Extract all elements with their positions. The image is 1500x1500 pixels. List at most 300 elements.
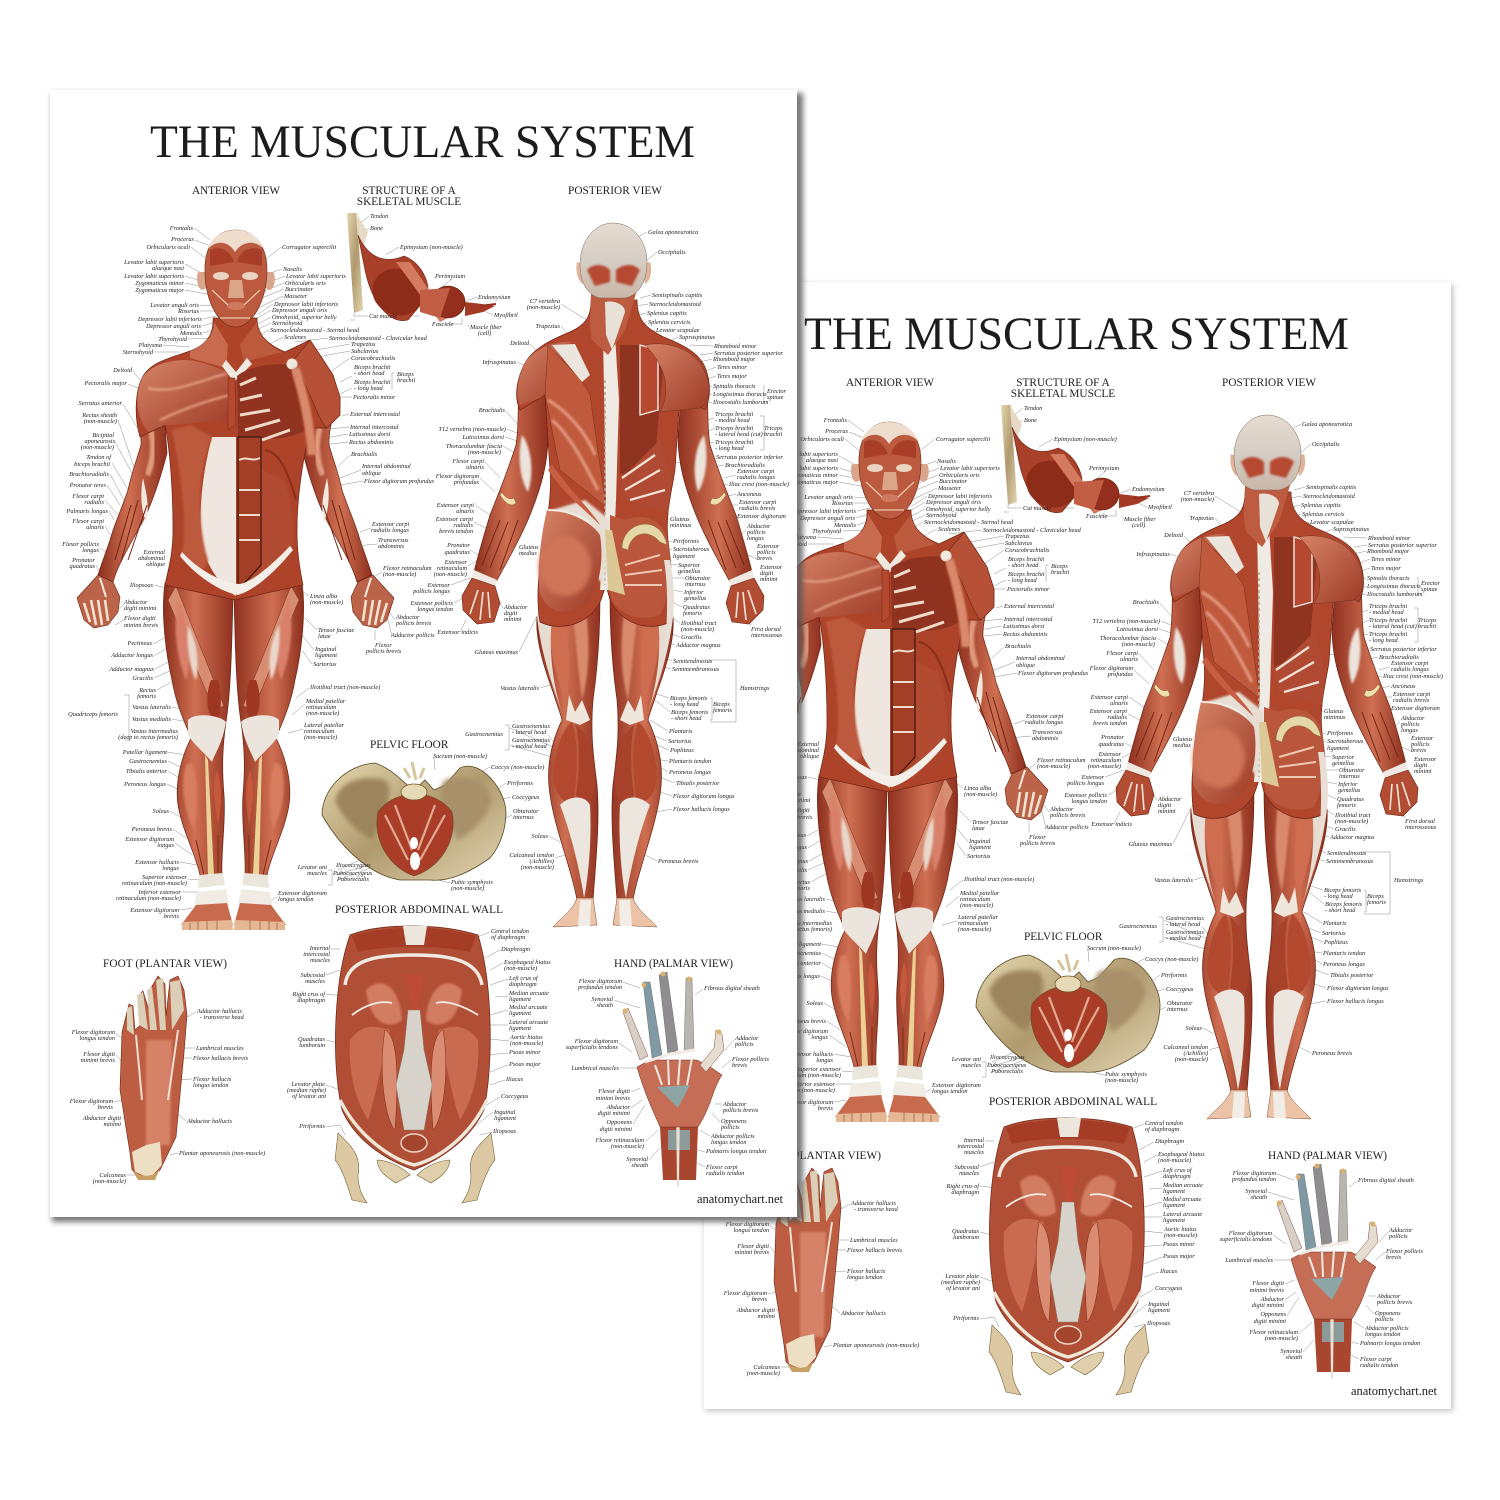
poster 1 labels: Flexor digitorum longus xyxy=(672,793,735,800)
poster 1 labels: Vastus medialis xyxy=(132,716,172,723)
poster 1 labels: Lumbrical muscles xyxy=(195,1045,244,1052)
poster 1 labels: Zygomaticus minor xyxy=(135,280,185,287)
poster 2 labels: Quadriceps femoris xyxy=(722,903,773,910)
poster 2 labels: Flexor carpi xyxy=(1105,650,1138,657)
poster 2 labels: Extensor xyxy=(1098,751,1122,758)
poster 1 labels: Biceps xyxy=(713,701,730,708)
poster 1 website: anatomychart.net xyxy=(697,1192,784,1206)
poster 1 labels: Buccinator xyxy=(285,286,314,293)
poster 2 labels: Peroneus longus xyxy=(1322,961,1365,968)
poster 1 labels: oblique xyxy=(146,561,165,568)
poster 1 labels: longus xyxy=(162,865,180,872)
poster 1 labels: (non-muscle) xyxy=(93,1178,126,1185)
poster 2 heading: structure of a skeletal muscle xyxy=(1011,377,1115,400)
poster 2 labels: Zygomaticus major xyxy=(789,479,839,486)
poster 1 labels: Adductor longus xyxy=(110,652,154,659)
poster 2 labels: minimi brevis xyxy=(1250,1287,1285,1294)
poster 2 labels: minimi xyxy=(1414,768,1432,775)
poster 1 labels: oblique xyxy=(362,470,381,477)
poster 2 labels: Rectus abdominis xyxy=(1002,631,1048,638)
poster 1 labels: Erector xyxy=(766,388,787,395)
poster 1 labels: Rectus abdominis xyxy=(348,439,394,446)
poster 2 labels: External xyxy=(796,741,819,748)
poster 1 labels: Linea alba xyxy=(309,593,337,600)
poster 1 labels: digiti minimi xyxy=(600,1126,632,1133)
poster 2 labels: - lateral head xyxy=(1166,921,1201,928)
poster 1 labels: Gracilis xyxy=(132,675,154,682)
poster 2 labels: Calcaneal tendon xyxy=(1163,1044,1208,1051)
poster 1 labels: radialis longus xyxy=(737,474,776,481)
poster 1 labels: Fibrous digital sheath xyxy=(703,985,760,992)
poster 2 labels: Serratus posterior superior xyxy=(1368,542,1437,549)
poster 1 labels: Right crus of xyxy=(291,991,326,998)
poster 1 labels: Omohyoid, superior belly xyxy=(272,314,337,321)
poster 1 labels: Aortic hiatus xyxy=(509,1034,543,1041)
poster 1 labels: spinae xyxy=(767,394,784,401)
poster 1 labels: Levator plate xyxy=(290,1081,325,1088)
poster 1 labels: Plantar aponeurosis (non-muscle) xyxy=(178,1150,265,1157)
poster 1 labels: Coccyx (non-muscle) xyxy=(491,764,544,771)
poster 2 labels: radialis tendon xyxy=(1360,1362,1398,1369)
poster 1 labels: Obturator xyxy=(685,575,711,582)
poster 1 labels: Puborectalis xyxy=(336,876,369,883)
poster 1 labels: Brachialis xyxy=(351,451,378,458)
poster 2 labels: radialis brevis xyxy=(1393,697,1430,704)
poster 1 labels: ligament xyxy=(315,652,337,659)
poster 2 labels: Bicipital xyxy=(746,624,768,631)
poster 2 labels: Peroneus longus xyxy=(777,973,821,980)
poster 2 labels: muscles xyxy=(959,1170,980,1177)
poster 1 labels: Extensor xyxy=(444,559,468,566)
poster 1 labels: Pronator xyxy=(446,542,471,549)
poster 1 labels: Superior extensor xyxy=(142,874,188,881)
poster 2 labels: - long head xyxy=(1369,637,1399,644)
poster 2 labels: Gracilis xyxy=(1335,826,1356,833)
poster 2 labels: Buccinator xyxy=(939,478,968,485)
poster 2 labels: pollicis xyxy=(1374,1316,1394,1323)
poster 1 labels: Subclavius xyxy=(351,348,379,355)
poster 1 labels: Extensor xyxy=(759,564,783,571)
poster 2 labels: Flexor carpi xyxy=(725,710,758,717)
poster 1 labels: Tensor fasciae xyxy=(318,627,355,634)
poster 2 labels: Infraspinatus xyxy=(1135,551,1171,558)
poster 2 labels: Adductor pollicis xyxy=(1044,824,1089,831)
poster 1 labels: Pronator teres xyxy=(69,482,107,489)
poster 1 labels: Plantaris tendon xyxy=(668,758,711,765)
poster 1 labels: pollicis brevis xyxy=(365,648,402,655)
poster 2 labels: Transversus xyxy=(1032,729,1063,736)
poster 2 labels: Subcostal xyxy=(954,1164,979,1171)
poster 2 labels: - medial head xyxy=(1166,935,1201,942)
poster 1 labels: longus tendon xyxy=(79,1035,115,1042)
poster 1 labels: Vastus lateralis xyxy=(132,704,172,711)
poster 2 labels: Gastrocnemius xyxy=(1166,915,1204,922)
poster 1 labels: Extensor pollicis xyxy=(410,600,454,607)
poster 2 labels: profundus tendon xyxy=(1231,1176,1276,1183)
poster 1 labels: Anconeus xyxy=(736,491,762,498)
poster 1 labels: Pubococcygeus xyxy=(332,870,373,877)
poster 2 labels: biceps brachii xyxy=(728,653,764,660)
poster 2 labels: Brachioradialis xyxy=(1379,654,1419,661)
poster 1 labels: Flexor digitorum xyxy=(69,1098,113,1105)
poster 1 labels: Bicipital xyxy=(92,432,114,439)
poster 1 labels: Psoas major xyxy=(508,1061,541,1068)
poster 2 labels: abdominal xyxy=(792,747,819,754)
poster 1 labels: Gastrocnemius xyxy=(129,758,168,765)
poster 2 labels: Iliopsoas xyxy=(1146,1320,1171,1327)
poster 1 labels: Sternocleidomastoid - Sternal head xyxy=(270,327,360,334)
poster 2 labels: Triceps brachii xyxy=(1369,617,1408,624)
poster 2 labels: Abductor xyxy=(1157,796,1182,803)
poster 2 labels: Gastrocnemius xyxy=(1119,923,1158,930)
poster 2 labels: pollicis brevis xyxy=(1376,1299,1413,1306)
poster 2 labels: Sternocleidomastoid xyxy=(1303,493,1356,500)
poster 1 labels: Corrugator supercilii xyxy=(282,244,336,251)
poster 2 labels: Extensor indicis xyxy=(1090,821,1133,828)
poster 1 labels: muscles xyxy=(310,957,331,964)
poster 1 labels: Serratus posterior inferior xyxy=(716,454,783,461)
poster 2 labels: (deep to rectus femoris) xyxy=(772,926,832,933)
poster 1 labels: Abductor xyxy=(123,599,148,606)
poster 2 labels: Omohyoid, superior belly xyxy=(926,506,991,513)
poster 1 labels: quadratus xyxy=(444,549,471,556)
poster 2 labels: Pectineus xyxy=(781,832,807,839)
poster 2 labels: Flexor digitorum xyxy=(725,1221,769,1228)
poster 1 labels: Mentalis xyxy=(179,330,203,337)
poster 1 labels: retinaculum (non-muscle) xyxy=(122,880,187,887)
poster 1 labels: Internal intercostal xyxy=(349,424,399,431)
poster 1 labels: Flexor digitorum xyxy=(574,1038,618,1045)
poster 1 labels: (non-muscle) xyxy=(521,864,554,871)
poster 2 labels: Pronator teres xyxy=(723,674,761,681)
poster 2 labels: Left crus of xyxy=(1162,1167,1193,1174)
poster 2 labels: Thyrohyoid xyxy=(812,528,842,535)
poster 1 diagram: foot xyxy=(120,976,187,1180)
poster 1 labels: muscles xyxy=(305,978,326,985)
poster 1 labels: retinaculum xyxy=(304,728,335,735)
poster 2 labels: latae xyxy=(972,825,985,832)
poster 2 labels: Sternocleidomastoid - Clavicular head xyxy=(983,527,1082,534)
poster 2 labels: Gracilis xyxy=(786,867,808,874)
poster 2 labels: Vastus lateralis xyxy=(1154,877,1194,884)
poster 1 labels: pollicis xyxy=(756,549,776,556)
poster 2 labels: sheath xyxy=(1251,1194,1267,1201)
poster 1 labels: (non-muscle) xyxy=(304,734,337,741)
poster 2 labels: C7 vertebra xyxy=(1184,490,1214,497)
poster 1 labels: Rhomboid minor xyxy=(713,343,757,350)
poster 2 labels: Internal abdominal xyxy=(1015,655,1065,662)
poster 2 labels: Sternocleidomastoid - Sternal head xyxy=(924,519,1014,526)
poster 2 labels: Calcaneus xyxy=(753,1364,781,1371)
poster 1 labels: Gastrocnemius xyxy=(512,723,550,730)
poster 1 labels: Abductor xyxy=(395,614,420,621)
poster 1 labels: (cell) xyxy=(478,330,491,337)
poster 1 labels: Flexor hallucis xyxy=(192,1076,232,1083)
poster 2 labels: Triceps xyxy=(1418,617,1437,624)
poster 1 labels: Inguinal xyxy=(493,1109,516,1116)
poster 1 labels: - lateral head (cut) xyxy=(715,431,763,438)
poster 1 labels: - lateral head xyxy=(512,729,547,736)
poster 1 labels: Biceps xyxy=(397,371,414,378)
poster 2 labels: Coccygeus xyxy=(1166,986,1194,993)
poster 2 labels: Medial arcuate xyxy=(1162,1196,1202,1203)
poster 2 labels: - medial head xyxy=(1369,609,1404,616)
poster 1 labels: gemellus xyxy=(678,568,701,575)
poster 1 labels: Extensor digitorum xyxy=(124,836,174,843)
poster 1 labels: Iliococcygeus xyxy=(335,862,371,869)
poster 1 labels: Biceps brachii xyxy=(354,364,391,371)
poster 1 labels: External xyxy=(142,549,165,556)
poster 1 labels: latae xyxy=(318,633,331,640)
poster 2 labels: Flexor digiti xyxy=(777,807,810,814)
poster 2 labels: Opponens xyxy=(1260,1311,1287,1318)
poster 1 diagram: pelvic floor xyxy=(322,762,506,880)
poster 1 labels: Scalenes xyxy=(284,334,307,341)
poster 1 labels: of levator ani xyxy=(292,1093,326,1100)
poster 1 labels: Sternocleidomastoid - Clavicular head xyxy=(329,335,428,342)
poster 1 labels: Iliac crest (non-muscle) xyxy=(728,481,789,488)
poster 1 labels: Extensor carpi xyxy=(435,516,473,523)
poster 2 labels: ligament xyxy=(1327,745,1349,752)
poster 2 labels: pollicis longus xyxy=(1066,780,1105,787)
poster 1 labels: Sternohyoid xyxy=(272,320,303,327)
poster 1 labels: (non-muscle) xyxy=(510,1040,543,1047)
poster 1 labels: T12 vertebra (non-muscle) xyxy=(438,426,506,433)
poster 1 labels: Lateral patellar xyxy=(303,722,345,729)
poster 2 labels: lumborum xyxy=(953,1234,979,1241)
poster 2 labels: (non-muscle) xyxy=(1335,818,1368,825)
poster 1 labels: Levator anguli oris xyxy=(149,302,200,309)
poster 2 labels: Flexor pollicis xyxy=(1385,1248,1423,1255)
poster 2 labels: Spinalis thoracis xyxy=(1367,575,1410,582)
poster 1 heading: anterior view: ANTERIOR VIEW xyxy=(192,185,280,197)
poster 1 labels: Abductor digiti xyxy=(82,1115,121,1122)
poster 2 labels: Corrugator supercilii xyxy=(936,436,990,443)
poster 1 labels: radialis longus xyxy=(371,527,410,534)
poster 1 labels: sheath xyxy=(597,1002,613,1009)
poster 2 labels: (non-muscle) xyxy=(735,636,768,643)
poster 2 labels: Extensor carpi xyxy=(1089,708,1127,715)
poster 1 labels: profundus tendon xyxy=(577,984,622,991)
poster 2 labels: digiti minimi xyxy=(778,797,811,804)
poster 1 labels: ulnaris xyxy=(456,508,475,515)
poster 1 labels: gemellus xyxy=(684,595,707,602)
poster 2 labels: Inferior extensor xyxy=(792,1081,836,1088)
poster 2 labels: Brachialis xyxy=(1005,643,1032,650)
poster 2 labels: gemellus xyxy=(1332,760,1355,767)
poster 2 labels: Depressor anguli oris xyxy=(799,515,856,522)
poster 1 labels: Brachioradialis xyxy=(69,471,110,478)
poster 2 labels: Flexor digitorum xyxy=(723,1290,767,1297)
poster 2 labels: Deltoid xyxy=(766,559,787,566)
poster 2 labels: Supraspinatus xyxy=(1333,526,1370,533)
poster 2 labels: Semispinalis capitis xyxy=(1306,484,1357,491)
poster 2 labels: diaphragm xyxy=(951,1189,979,1196)
poster 1 labels: Pectineus xyxy=(127,640,153,647)
poster 2 labels: Sartorius xyxy=(1322,930,1346,937)
poster 1 labels: - transverse head xyxy=(200,1014,245,1021)
poster 1 labels: Levator labii superioris xyxy=(123,273,185,280)
poster 1 labels: Rectus sheath xyxy=(81,412,117,419)
poster 2 labels: Rhomboid minor xyxy=(1367,535,1411,542)
poster 1 labels: brevis tendon xyxy=(439,528,473,535)
poster 1 labels: Flexor xyxy=(374,642,392,649)
poster 2 labels: Brachioradialis xyxy=(723,663,764,670)
poster 1 labels: Gluteus xyxy=(519,544,539,551)
poster 2 labels: Brachialis xyxy=(1133,599,1160,606)
poster 1 labels: Gastrocnemius xyxy=(465,731,504,738)
poster 1 labels: Trapezius xyxy=(351,341,376,348)
poster 1 labels: Brachioradialis xyxy=(725,462,765,469)
poster 2 labels: Soleus xyxy=(1186,1025,1203,1032)
poster 2 labels: Iliacus xyxy=(1159,1268,1178,1275)
poster 1 labels: Flexor pollicis xyxy=(61,541,100,548)
poster 1 labels: internus xyxy=(685,581,706,588)
poster 2 labels: (non-muscle) xyxy=(1037,763,1070,770)
poster 1 labels: minimi brevis xyxy=(81,1057,116,1064)
poster 1 labels: Iliopsoas xyxy=(492,1128,517,1135)
poster 1 labels: (non-muscle) xyxy=(306,710,339,717)
poster 1 labels: Latissimus dorsi xyxy=(348,431,391,438)
poster 2 labels: Piriformis xyxy=(1326,730,1353,737)
poster 1 labels: Pubic symphysis xyxy=(450,879,493,886)
poster 1 labels: pollicis xyxy=(720,1124,740,1131)
poster 2 labels: Myofibril xyxy=(1147,504,1172,511)
poster 1 labels: Flexor hallucis longus xyxy=(672,806,730,813)
poster 2 labels: Quadratus xyxy=(952,1228,980,1235)
poster 2 labels: retinaculum xyxy=(1091,757,1121,764)
poster 2 labels: Vastus medialis xyxy=(786,908,826,915)
poster 1 labels: Calcaneus xyxy=(99,1172,127,1179)
poster 1 labels: Peroneus longus xyxy=(668,769,711,776)
poster 1 labels: superficialis tendons xyxy=(566,1044,619,1051)
poster 2 labels: (non-muscle) xyxy=(1088,763,1121,770)
poster 2 labels: Bone xyxy=(1024,417,1037,424)
poster 2 labels: Epimysium (non-muscle) xyxy=(1053,436,1117,443)
poster 2: rear sheet xyxy=(704,282,1453,1411)
poster 1 labels: Risorius xyxy=(177,308,200,315)
poster 2 labels: Flexor retinaculum xyxy=(1036,757,1086,764)
poster 2 labels: Inguinal xyxy=(968,838,991,845)
poster 1 labels: alaeque nasi xyxy=(152,265,184,272)
poster 2 labels: Lateral patellar xyxy=(957,914,999,921)
poster 2 labels: Pectoralis major xyxy=(737,572,782,579)
poster 2 labels: - long head xyxy=(1324,893,1354,900)
poster 2 labels: Biceps femoris xyxy=(1324,887,1362,894)
poster 2 labels: Semimembranosus xyxy=(1326,858,1374,865)
poster 1 labels: Epimysium (non-muscle) xyxy=(399,244,463,251)
poster 2 labels: Inguinal xyxy=(1147,1301,1170,1308)
poster 2 labels: Abductor xyxy=(1400,715,1425,722)
poster 2 labels: Lateral arcuate xyxy=(1162,1211,1202,1218)
poster 2 labels: Flexor hallucis xyxy=(846,1268,886,1275)
poster 2 labels: radialis longus xyxy=(1391,666,1430,673)
poster 2 labels: interosseous xyxy=(1405,824,1437,831)
poster 1 labels: Adductor pollicis xyxy=(390,632,435,639)
poster 1 labels: Bone xyxy=(370,225,383,232)
poster 1 labels: (deep to rectus femoris) xyxy=(118,734,178,741)
poster 1 labels: medius xyxy=(519,550,537,557)
poster 2 labels: Extensor xyxy=(1081,774,1105,781)
poster 1 labels: ligament xyxy=(509,1025,531,1032)
poster 2 labels: (non-muscle) xyxy=(1158,1157,1191,1164)
poster 2 labels: Lumbrical muscles xyxy=(1224,1257,1274,1264)
poster 2 labels: Gastrocnemius xyxy=(783,950,822,957)
poster 1 labels: - short head xyxy=(354,370,385,377)
poster 2 labels: Coracobrachialis xyxy=(1005,547,1050,554)
poster 1 labels: Flexor digitorum xyxy=(578,978,622,985)
poster 1 heading: posterior abdominal wall: POSTERIOR ABDOMINAL WALL xyxy=(335,904,503,916)
poster 1 labels: - long head xyxy=(715,445,745,452)
poster 1 labels: Depressor anguli oris xyxy=(271,307,328,314)
poster 2 labels: Triceps brachii xyxy=(1369,603,1408,610)
poster 1 labels: Occipitalis xyxy=(658,249,686,256)
poster 2 labels: Flexor xyxy=(1028,834,1046,841)
poster 1 labels: Tendon xyxy=(370,213,388,220)
poster 2 labels: longus xyxy=(736,739,754,746)
poster 2 labels: Vastus lateralis xyxy=(786,896,826,903)
poster 2 labels: Fibrous digital sheath xyxy=(1357,1177,1414,1184)
poster 1 labels: Abductor xyxy=(606,1104,631,1111)
poster 2 labels: Erector xyxy=(1420,580,1441,587)
poster 1 labels: Extensor indicis xyxy=(436,629,479,636)
poster 1 labels: pollicis xyxy=(734,1041,754,1048)
poster 2 labels: Plantaris xyxy=(1322,920,1347,927)
poster 1 labels: Iliocostalis lumborum xyxy=(712,399,769,406)
poster 1 diagram: abdominal wall xyxy=(335,926,495,1203)
poster 2 labels: Quadratus xyxy=(1337,796,1364,803)
poster 2 labels: Flexor carpi xyxy=(1359,1356,1392,1363)
poster 1 labels: Coccygeus xyxy=(512,794,540,801)
poster 2 labels: (non-muscle) xyxy=(738,610,771,617)
poster 1 labels: brevis xyxy=(757,555,773,562)
poster 1 labels: (non-muscle) xyxy=(504,965,537,972)
poster 1 labels: Depressor labii inferioris xyxy=(273,301,339,308)
poster 1 labels: Endomysium xyxy=(477,294,511,301)
poster 1 labels: Flexor carpi xyxy=(71,493,104,500)
poster 1 labels: Iliopsoas xyxy=(129,582,154,589)
poster 1 labels: Triceps xyxy=(764,425,783,432)
poster 2 labels: Biceps xyxy=(1367,893,1384,900)
poster 1 labels: Gluteus xyxy=(670,516,690,523)
poster 2 diagram: skeletal muscle xyxy=(1001,405,1150,515)
poster 2 labels: Biceps xyxy=(1051,563,1068,570)
poster 2 labels: Puborectalis xyxy=(990,1068,1023,1075)
poster 2 labels: Orbicularis oculi xyxy=(800,436,844,443)
poster 2 title: THE MUSCULAR SYSTEM xyxy=(804,308,1349,360)
poster 1 labels: digiti minimi xyxy=(124,605,157,612)
poster 2 labels: Muscle fiber xyxy=(1123,516,1156,523)
poster 2 labels: - transverse head xyxy=(854,1206,899,1213)
poster 2 labels: oblique xyxy=(800,753,819,760)
poster 2 labels: Esophageal hiatus xyxy=(1157,1151,1205,1158)
poster 2 labels: Popliteus xyxy=(1323,939,1348,946)
poster 2 labels: Obturator xyxy=(1167,1000,1193,1007)
poster 1 labels: Splenius cervicis xyxy=(648,319,691,326)
poster 2 labels: Internal intercostal xyxy=(1003,616,1053,623)
poster 2 labels: spinae xyxy=(1421,586,1438,593)
poster 2 labels: intercostal xyxy=(957,1143,984,1150)
poster 1 labels: (non-muscle) xyxy=(451,885,484,892)
poster 1 labels: Piriformis xyxy=(672,538,699,545)
poster 1 labels: Muscle fiber xyxy=(469,324,502,331)
poster 1 labels: ligament xyxy=(494,1115,516,1122)
poster 1 labels: Left crus of xyxy=(508,975,539,982)
poster 1 labels: Biceps brachii xyxy=(354,379,391,386)
poster 2 shadow xyxy=(705,284,1453,1411)
poster 2 labels: Plantaris tendon xyxy=(1322,950,1365,957)
poster 2 labels: radialis xyxy=(738,691,759,698)
